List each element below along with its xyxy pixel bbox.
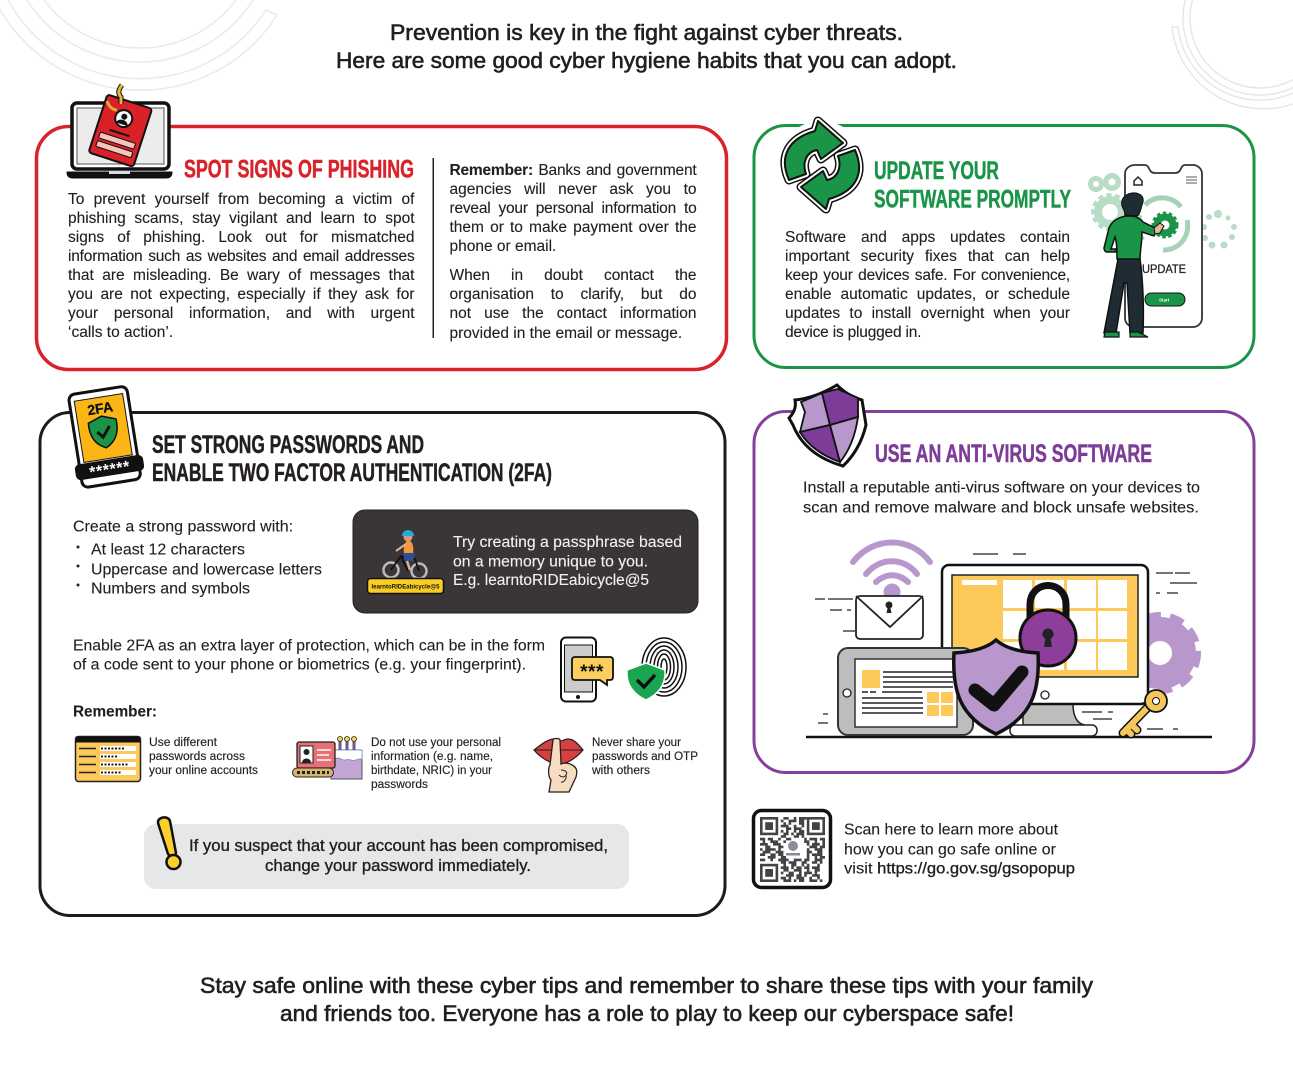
text block: phishing description: ‘calls to action’. bbox=[68, 324, 173, 341]
QR code bbox=[754, 810, 830, 888]
text block: enable 2FA: of a code sent to your phone or biometrics (e.g. your fingerprint). bbox=[73, 656, 526, 674]
text block: update description: device is plugged in. bbox=[785, 324, 921, 341]
text block: remember banks and government: not use the contact information bbox=[450, 305, 696, 322]
tip: use different passwords: Use different bbox=[149, 737, 218, 749]
callout: passphrase tip: on a memory unique to you. bbox=[453, 554, 648, 570]
text block: remember banks and government: agencies will never ask you to bbox=[450, 181, 696, 198]
footer text: Stay safe online with these cyber tips and remember to share these tips with your family bbox=[200, 973, 1093, 998]
tip: no personal information bbox=[292, 736, 501, 791]
icon: wifi bbox=[853, 542, 930, 598]
text block: phishing description: phishing scams, stay vigilant and learn to spot bbox=[68, 210, 414, 227]
callout: passphrase tip bbox=[353, 510, 698, 613]
icon: child on bicycle bbox=[368, 530, 444, 594]
text block: update description: Software and apps updates contain bbox=[785, 228, 1070, 246]
icon: desktop monitor bbox=[942, 565, 1148, 736]
tip: never share passwords bbox=[534, 737, 698, 792]
tip: never share passwords: with others bbox=[591, 765, 650, 777]
text block: phishing description bbox=[68, 190, 414, 344]
heading: set strong passwords and 2FA: ENABLE TWO FACTOR AUTHENTICATION (2FA) bbox=[152, 459, 552, 487]
icon: gear bbox=[1123, 616, 1197, 690]
text block: remember banks and government: Remember: Banks and government bbox=[450, 162, 696, 178]
QR code block bbox=[752, 808, 1075, 890]
text block: scan here: how you can go safe online or bbox=[844, 842, 1056, 858]
text block: remember banks and government: organisation to clarify, but do bbox=[450, 286, 696, 303]
tip: use different passwords: passwords across bbox=[149, 751, 245, 763]
header text: Prevention is key in the fight against cyber threats. bbox=[390, 20, 903, 45]
heading: update your software promptly: SOFTWARE PROMPTLY bbox=[874, 186, 1071, 214]
text block: phishing description: your personal information, and with urgent bbox=[68, 305, 414, 322]
heading: update your software promptly: UPDATE YOUR bbox=[874, 157, 999, 185]
callout: compromised account bbox=[144, 817, 629, 889]
tip: never share passwords: passwords and OTP bbox=[592, 751, 698, 763]
icon: green refresh arrows bbox=[777, 121, 865, 209]
text block: remember banks and government bbox=[450, 160, 696, 342]
text block: enable 2FA bbox=[73, 638, 545, 674]
panel: update your software promptly bbox=[752, 116, 1256, 369]
text block: strong password list: Numbers and symbols bbox=[91, 580, 250, 598]
text block: update description: keep your devices safe. For convenience, bbox=[785, 267, 1070, 284]
text block: phishing description: that are misleading. Be wary of messages that bbox=[68, 267, 414, 284]
panel: set strong passwords and 2FA bbox=[38, 385, 726, 917]
tip: no personal information: birthdate, NRIC) in your bbox=[371, 765, 492, 777]
panel: spot signs of phishing bbox=[34, 84, 728, 372]
tip: use different passwords bbox=[76, 736, 258, 782]
text block: remember banks and government: provided in the email or message. bbox=[450, 325, 682, 342]
callout: compromised account: If you suspect that your account has been compromised, bbox=[189, 837, 608, 855]
icon: exclamation mark bbox=[158, 817, 180, 869]
heading: set strong passwords and 2FA: SET STRONG PASSWORDS AND bbox=[152, 431, 424, 459]
icon: ID card and cake bbox=[292, 736, 362, 779]
text block: scan here bbox=[844, 822, 1075, 878]
text block: anti-virus description bbox=[803, 480, 1200, 516]
subheading: remember: Remember: bbox=[73, 704, 157, 720]
icon: child on bicycle: learntoRIDEabicycle@5 bbox=[372, 584, 440, 590]
text block: update description: important security fixes that can help bbox=[785, 248, 1070, 265]
text block: update description bbox=[785, 228, 1070, 344]
decorative corner arcs bbox=[0, 0, 1293, 110]
illustration: person updating phone: UPDATE bbox=[1142, 264, 1186, 276]
footer text bbox=[200, 973, 1094, 1026]
icon: 2FA phone: ****** bbox=[88, 458, 132, 482]
icon: key bbox=[1123, 690, 1167, 734]
text block: strong password list: Create a strong password with: bbox=[73, 518, 293, 536]
text block: strong password list: At least 12 characters bbox=[91, 542, 245, 558]
icon: lips with finger bbox=[534, 738, 583, 792]
text block: phishing description: To prevent yourself from becoming a victim of bbox=[68, 190, 414, 208]
text block: scan here: visit https://go.gov.sg/gsopopup bbox=[844, 860, 1075, 878]
icon: fingerprint with shield bbox=[627, 638, 686, 700]
illustration: devices protected bbox=[806, 542, 1212, 737]
tip: never share passwords: Never share your bbox=[592, 737, 681, 749]
text block: phishing description: signs of phishing. Look out for mismatched bbox=[68, 229, 414, 246]
icon: shield with check bbox=[954, 640, 1038, 734]
text block: phishing description: you are not expecting, especially if they ask for bbox=[68, 286, 414, 303]
tip: no personal information: passwords bbox=[371, 779, 428, 791]
text block: remember banks and government: When in doubt contact the bbox=[450, 267, 696, 284]
text block: anti-virus description: Install a reputable anti-virus software on your devices to bbox=[803, 480, 1200, 496]
icon: envelope bbox=[856, 596, 923, 639]
icon: phone with OTP bubble bbox=[561, 638, 613, 702]
illustration: person updating phone: Start bbox=[1159, 298, 1170, 302]
icon: quartered shield bbox=[789, 385, 866, 466]
callout: passphrase tip: Try creating a passphrase based bbox=[453, 534, 682, 551]
header text: Here are some good cyber hygiene habits that you can adopt. bbox=[336, 48, 957, 73]
icon: 2FA phone bbox=[63, 385, 146, 489]
tip: use different passwords: your online accounts bbox=[149, 765, 258, 777]
icon: laptop with phishing hook bbox=[67, 85, 172, 178]
footer text: and friends too. Everyone has a role to play to keep our cyberspace safe! bbox=[280, 1001, 1014, 1026]
heading: spot signs of phishing: SPOT SIGNS OF PHISHING bbox=[184, 156, 414, 184]
tip: no personal information: Do not use your personal bbox=[371, 737, 501, 749]
heading: update your software promptly bbox=[874, 157, 1071, 214]
icon: password list window bbox=[76, 736, 140, 782]
callout: passphrase tip: E.g. learntoRIDEabicycle@5 bbox=[453, 572, 649, 589]
icon: padlock bbox=[1020, 586, 1076, 666]
callout: compromised account: change your password immediately. bbox=[265, 857, 531, 875]
heading: use an anti-virus software: USE AN ANTI-VIRUS SOFTWARE bbox=[875, 440, 1152, 468]
text block: enable 2FA: Enable 2FA as an extra layer of protection, which can be in the form bbox=[73, 638, 545, 654]
text block: strong password list bbox=[73, 518, 322, 598]
heading: set strong passwords and 2FA bbox=[152, 431, 552, 487]
icon: tablet bbox=[838, 648, 973, 735]
tip: no personal information: information (e.g. name, bbox=[371, 751, 493, 763]
text block: update description: updates to install overnight when your bbox=[785, 305, 1070, 322]
illustration: person updating phone bbox=[1088, 165, 1237, 337]
text block: remember banks and government: them or to make payment over the bbox=[450, 219, 696, 236]
panel: use an anti-virus software bbox=[752, 383, 1256, 774]
text block: scan here: Scan here to learn more about bbox=[844, 822, 1059, 838]
text block: phishing description: information such as websites and email addresses bbox=[68, 248, 414, 265]
text block: remember banks and government: phone or email. bbox=[450, 238, 556, 255]
icon: 2FA phone: 2FA bbox=[86, 398, 114, 418]
text block: remember banks and government: reveal your personal information to bbox=[450, 200, 696, 217]
text block: anti-virus description: scan and remove malware and block unsafe websites. bbox=[803, 500, 1199, 516]
icon: phone with OTP bubble: *** bbox=[580, 662, 604, 683]
text block: update description: enable automatic updates, or schedule bbox=[785, 286, 1070, 303]
text block: strong password list: Uppercase and lowercase letters bbox=[91, 562, 322, 578]
header text bbox=[336, 20, 957, 73]
